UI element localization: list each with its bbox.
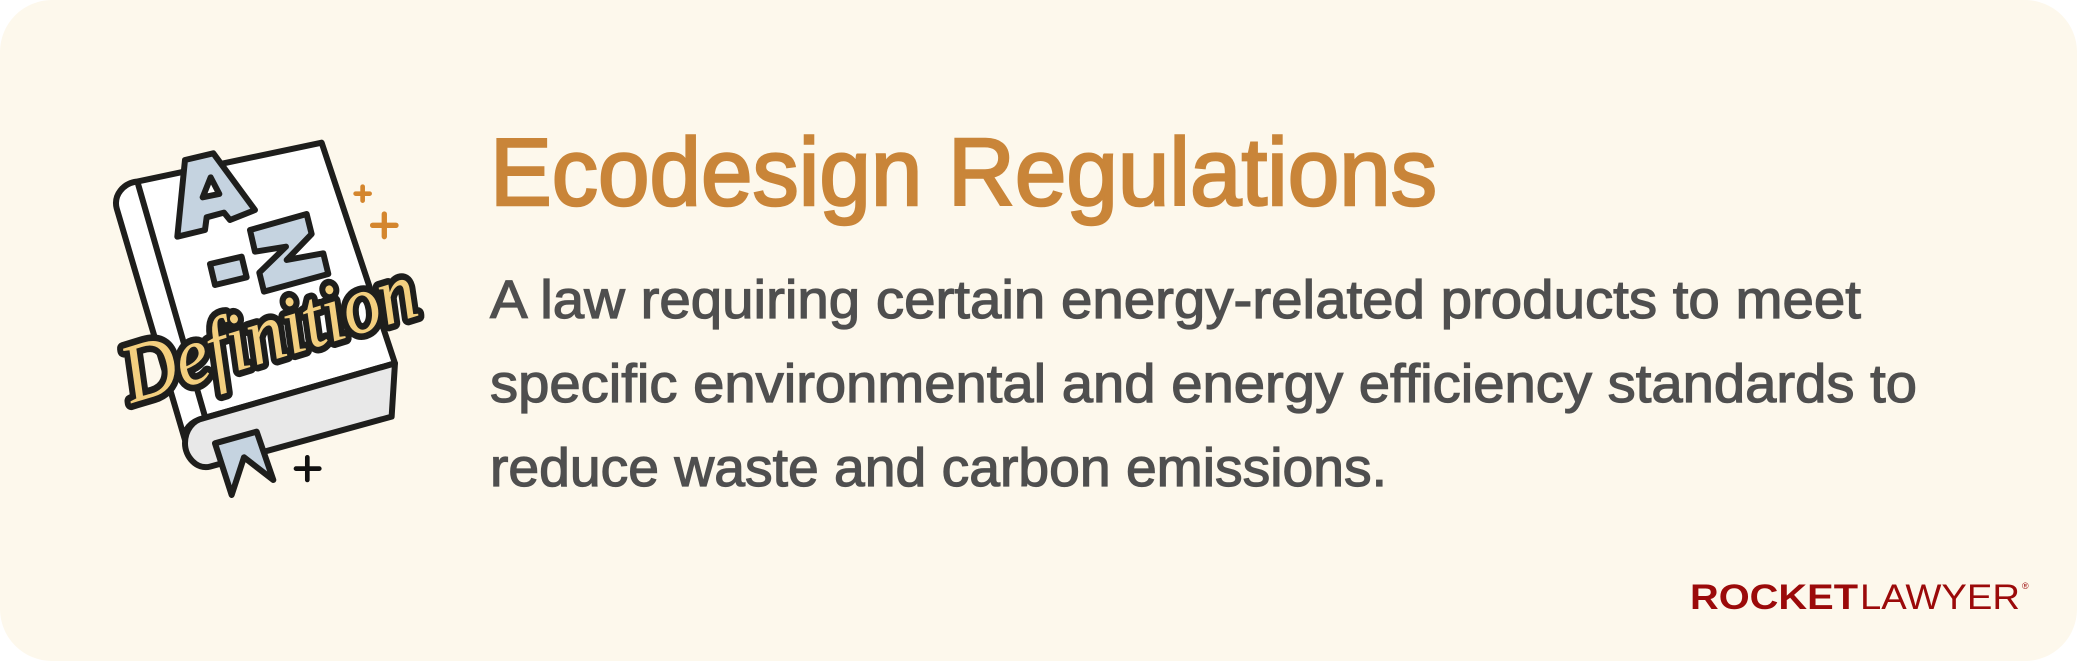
definition text [490, 270, 1917, 498]
logo: Rocket Lawyer: LAWYER [1860, 578, 2020, 617]
definition text: A law requiring certain energy-related products to meet [490, 270, 1861, 330]
logo: Rocket Lawyer: ROCKET [1690, 578, 1858, 617]
logo: Rocket Lawyer: ® [2022, 581, 2029, 591]
icon: dictionary book [109, 143, 427, 495]
definition text: specific environmental and energy efficiency standards to [490, 354, 1917, 414]
logo: Rocket Lawyer [1690, 578, 2029, 617]
icon: dictionary book: Definition [109, 245, 427, 422]
definition text: reduce waste and carbon emissions. [490, 438, 1387, 498]
title: Ecodesign Regulations [490, 119, 1437, 226]
